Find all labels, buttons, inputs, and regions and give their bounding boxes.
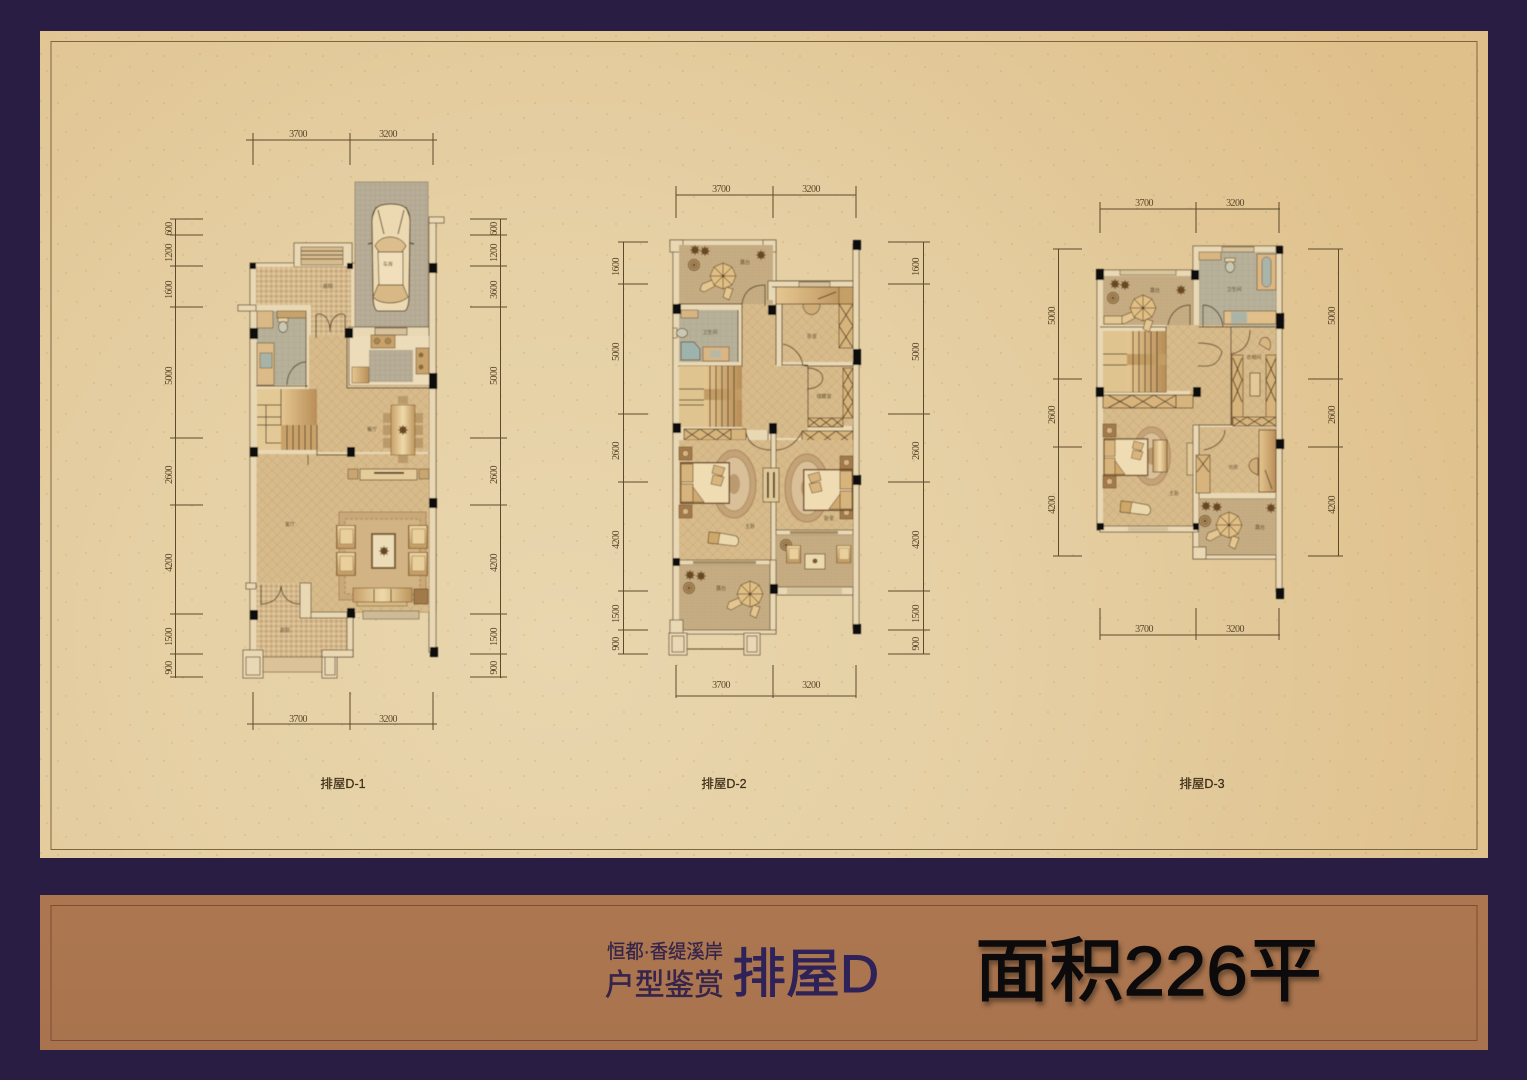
walls and rooms: D-1: 客厅	[285, 521, 295, 528]
area figure: 面积226平	[975, 932, 1322, 1010]
caption: D-3: 排屋D-3	[1179, 777, 1225, 791]
dimensions: D-1: 1600	[164, 281, 175, 299]
dimensions: D-2: 1600	[911, 258, 922, 276]
dimensions: D-1: 900	[489, 661, 500, 675]
walls and rooms: D-2	[669, 240, 861, 655]
area figure: 面积226平	[977, 936, 1324, 1014]
dimensions: D-1: 5000	[164, 367, 175, 385]
walls and rooms: D-3: 卫生间	[1226, 286, 1242, 293]
dimensions: D-1	[164, 129, 507, 730]
dimensions: D-3: 3700	[1135, 624, 1153, 635]
bathroom fixtures	[673, 310, 729, 361]
dimensions: D-1: 5000	[489, 367, 500, 385]
dimensions: D-3: 5000	[1327, 307, 1338, 325]
walls and rooms: D-1: 车库	[383, 261, 393, 268]
dimensions: D-1: 1500	[489, 628, 500, 646]
walls and rooms: D-3: 露台	[1150, 287, 1160, 294]
heading: project name: 恒都·香缇溪岸	[607, 941, 723, 963]
dimensions: D-2: 1500	[611, 605, 622, 623]
icon: car	[368, 204, 414, 311]
dimensions: D-1: 3700	[289, 129, 307, 140]
walls and rooms: D-2: 主卧	[745, 523, 755, 530]
wardrobes	[1103, 355, 1276, 493]
dimensions: D-2: 3200	[802, 184, 820, 195]
dimensions: D-2: 3200	[802, 680, 820, 691]
walls and rooms: D-2: 卫生间	[702, 329, 718, 336]
dining set	[383, 396, 423, 463]
dimensions: D-2: 2600	[911, 442, 922, 460]
wardrobes	[684, 304, 853, 444]
walls and rooms: D-1: 庭院	[323, 283, 333, 290]
living set	[336, 512, 428, 606]
dimensions: D-1: 3700	[289, 714, 307, 725]
dimensions: D-2: 900	[911, 637, 922, 651]
dimensions: D-3: 3200	[1226, 198, 1244, 209]
walls and rooms: D-3: 主卧	[1169, 490, 1179, 497]
front steps	[243, 650, 353, 678]
walls and rooms: D-3	[1096, 246, 1284, 599]
dimensions: D-3: 3200	[1226, 624, 1244, 635]
panel: title band	[40, 895, 1488, 1050]
walls and rooms: D-3: 衣帽间	[1246, 354, 1262, 361]
dimensions: D-2: 4200	[611, 531, 622, 549]
stairs	[1103, 331, 1166, 392]
dimensions: D-2	[611, 184, 930, 698]
heading: unit type: 排屋D	[732, 945, 879, 1004]
balcony furniture: D-3	[1104, 279, 1276, 549]
dimensions: D-2: 5000	[911, 343, 922, 361]
caption: D-1: 排屋D-1	[320, 777, 366, 791]
floor plan: D-1	[164, 129, 507, 730]
balcony furniture: D-2	[683, 245, 766, 618]
walls and rooms: D-2: 储藏室	[816, 393, 832, 400]
dimensions: D-1: 4200	[164, 554, 175, 572]
dimensions: D-2: 3700	[712, 680, 730, 691]
floor plan: D-3	[1047, 198, 1343, 640]
dimensions: D-1: 2600	[164, 466, 175, 484]
heading: floor plan appreciation: 户型鉴赏	[605, 969, 724, 1002]
dimensions: D-1: 3600	[489, 281, 500, 299]
dimensions: D-3	[1047, 198, 1343, 640]
dimensions: D-1: 1200	[164, 244, 175, 262]
dimensions: D-3: 5000	[1047, 307, 1058, 325]
walls and rooms: D-1	[238, 182, 444, 678]
dimensions: D-1: 4200	[489, 554, 500, 572]
dimensions: D-1: 3200	[379, 129, 397, 140]
walls and rooms: D-1: 餐厅	[367, 426, 377, 433]
caption: D-2: 排屋D-2	[701, 777, 747, 791]
dimensions: D-1: 600	[164, 222, 175, 236]
walls and rooms: D-1: 庭院	[280, 627, 290, 634]
dimensions: D-2: 900	[611, 637, 622, 651]
bathroom fixtures	[1199, 247, 1276, 324]
dimensions: D-3: 4200	[1327, 496, 1338, 514]
staircase	[257, 389, 347, 465]
walls and rooms: D-2: 卧室	[807, 333, 817, 340]
dimensions: D-3: 3700	[1135, 198, 1153, 209]
dimensions: D-2: 4200	[911, 531, 922, 549]
dimensions: D-3: 2600	[1047, 406, 1058, 424]
walls and rooms: D-3: 露台	[1255, 524, 1265, 531]
tv console	[348, 469, 429, 480]
dimensions: D-3: 2600	[1327, 406, 1338, 424]
dimensions: D-2: 3700	[712, 184, 730, 195]
dimensions: D-1: 600	[489, 222, 500, 236]
dimensions: D-2: 2600	[611, 442, 622, 460]
dimensions: D-1: 1500	[164, 628, 175, 646]
walls and rooms: D-2: 露台	[740, 259, 750, 266]
dimensions: D-2: 5000	[611, 343, 622, 361]
walls and rooms: D-2: 露台	[716, 585, 726, 592]
dimensions: D-1: 900	[164, 661, 175, 675]
balcony steps	[669, 620, 760, 655]
walls and rooms: D-2: 卧室	[824, 515, 834, 522]
dimensions: D-2: 1600	[611, 258, 622, 276]
walls and rooms: D-3: 书房	[1228, 464, 1238, 471]
dimensions: D-1: 1200	[489, 244, 500, 262]
floor plan: D-2	[611, 184, 930, 698]
dimensions: D-2: 1500	[911, 605, 922, 623]
dimensions: D-1: 3200	[379, 714, 397, 725]
panel: floor plans	[40, 31, 1488, 858]
dimensions: D-1: 2600	[489, 466, 500, 484]
dimensions: D-3: 4200	[1047, 496, 1058, 514]
